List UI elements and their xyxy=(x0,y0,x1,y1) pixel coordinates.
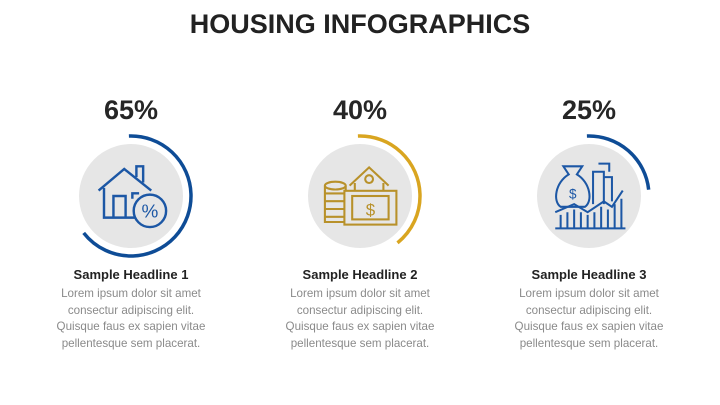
body 3: Quisque faus ex sapien vitae xyxy=(515,320,663,333)
body 1 xyxy=(57,287,205,350)
body 3 xyxy=(515,287,663,350)
percentage 3: 25% xyxy=(562,95,616,125)
ring with money house icon: $ xyxy=(366,200,376,219)
ring with investment icon xyxy=(537,134,650,248)
body 2: consectur adipiscing elit. xyxy=(297,304,423,317)
panel: item 1 xyxy=(57,95,205,350)
body 2 xyxy=(286,287,434,350)
headline 1: Sample Headline 1 xyxy=(74,267,188,282)
ring with house icon: % xyxy=(142,202,159,223)
body 3: Lorem ipsum dolor sit amet xyxy=(519,287,659,300)
body 2: pellentesque sem placerat. xyxy=(291,337,429,350)
percentage 2: 40% xyxy=(333,95,387,125)
headline 2: Sample Headline 2 xyxy=(303,267,417,282)
percentage 1: 65% xyxy=(104,95,158,125)
body 3: consectur adipiscing elit. xyxy=(526,304,652,317)
body 3: pellentesque sem placerat. xyxy=(520,337,658,350)
panel: item 2 xyxy=(286,95,434,350)
ring with house icon xyxy=(79,134,193,258)
body 2: Quisque faus ex sapien vitae xyxy=(286,320,434,333)
panel: item 3 xyxy=(515,95,663,350)
ring with investment icon: $ xyxy=(569,187,577,202)
body 1: Lorem ipsum dolor sit amet xyxy=(61,287,201,300)
body 1: Quisque faus ex sapien vitae xyxy=(57,320,205,333)
headline 3: Sample Headline 3 xyxy=(532,267,646,282)
ring with money house icon xyxy=(308,134,422,248)
body 1: pellentesque sem placerat. xyxy=(62,337,200,350)
body 1: consectur adipiscing elit. xyxy=(68,304,194,317)
title: HOUSING INFOGRAPHICS xyxy=(190,9,530,39)
body 2: Lorem ipsum dolor sit amet xyxy=(290,287,430,300)
